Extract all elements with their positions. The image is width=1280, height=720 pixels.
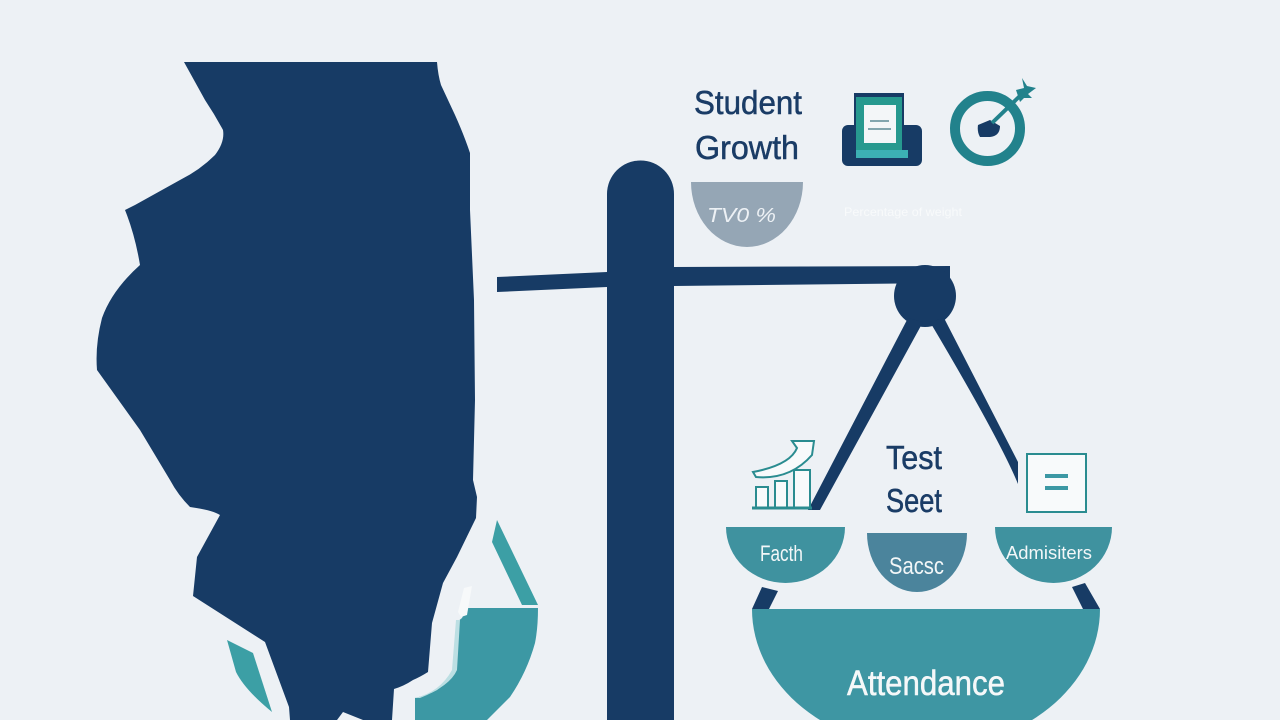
balance scale frame	[497, 160, 1100, 720]
label: test score	[886, 439, 942, 519]
bowl: admissions metric: Admisiters	[1006, 543, 1092, 563]
bowl: score metric	[867, 533, 967, 592]
bowl: growth metric: Facth	[760, 541, 803, 566]
Illinois state silhouette	[97, 62, 477, 720]
bowl connectors	[752, 583, 1100, 609]
heading: student growth: Student	[694, 84, 802, 121]
heading: student growth	[694, 84, 802, 166]
heading: student growth: Growth	[695, 129, 799, 166]
scale beam	[497, 266, 950, 292]
gray weight bowl	[691, 182, 803, 247]
icon: target with arrow	[955, 78, 1036, 161]
bowl: growth metric	[726, 527, 845, 583]
bowl: admissions metric	[995, 527, 1112, 583]
scale arms	[808, 318, 1018, 510]
label: test score: Test	[886, 439, 942, 476]
label: test score: Seet	[886, 482, 942, 519]
gray weight bowl: TV0 %	[707, 205, 776, 227]
bowl: attendance: Attendance	[847, 664, 1005, 703]
icon: document card	[1027, 454, 1086, 512]
icon: growth bar chart	[752, 441, 814, 508]
scale post	[607, 160, 674, 720]
bowl: score metric: Sacsc	[889, 553, 944, 580]
icon: document tray	[842, 93, 922, 166]
teal bowl behind state map	[227, 520, 538, 720]
scale pivot	[894, 265, 956, 327]
bowl: attendance	[752, 609, 1100, 720]
faint caption: Percentage of weight	[844, 205, 963, 219]
